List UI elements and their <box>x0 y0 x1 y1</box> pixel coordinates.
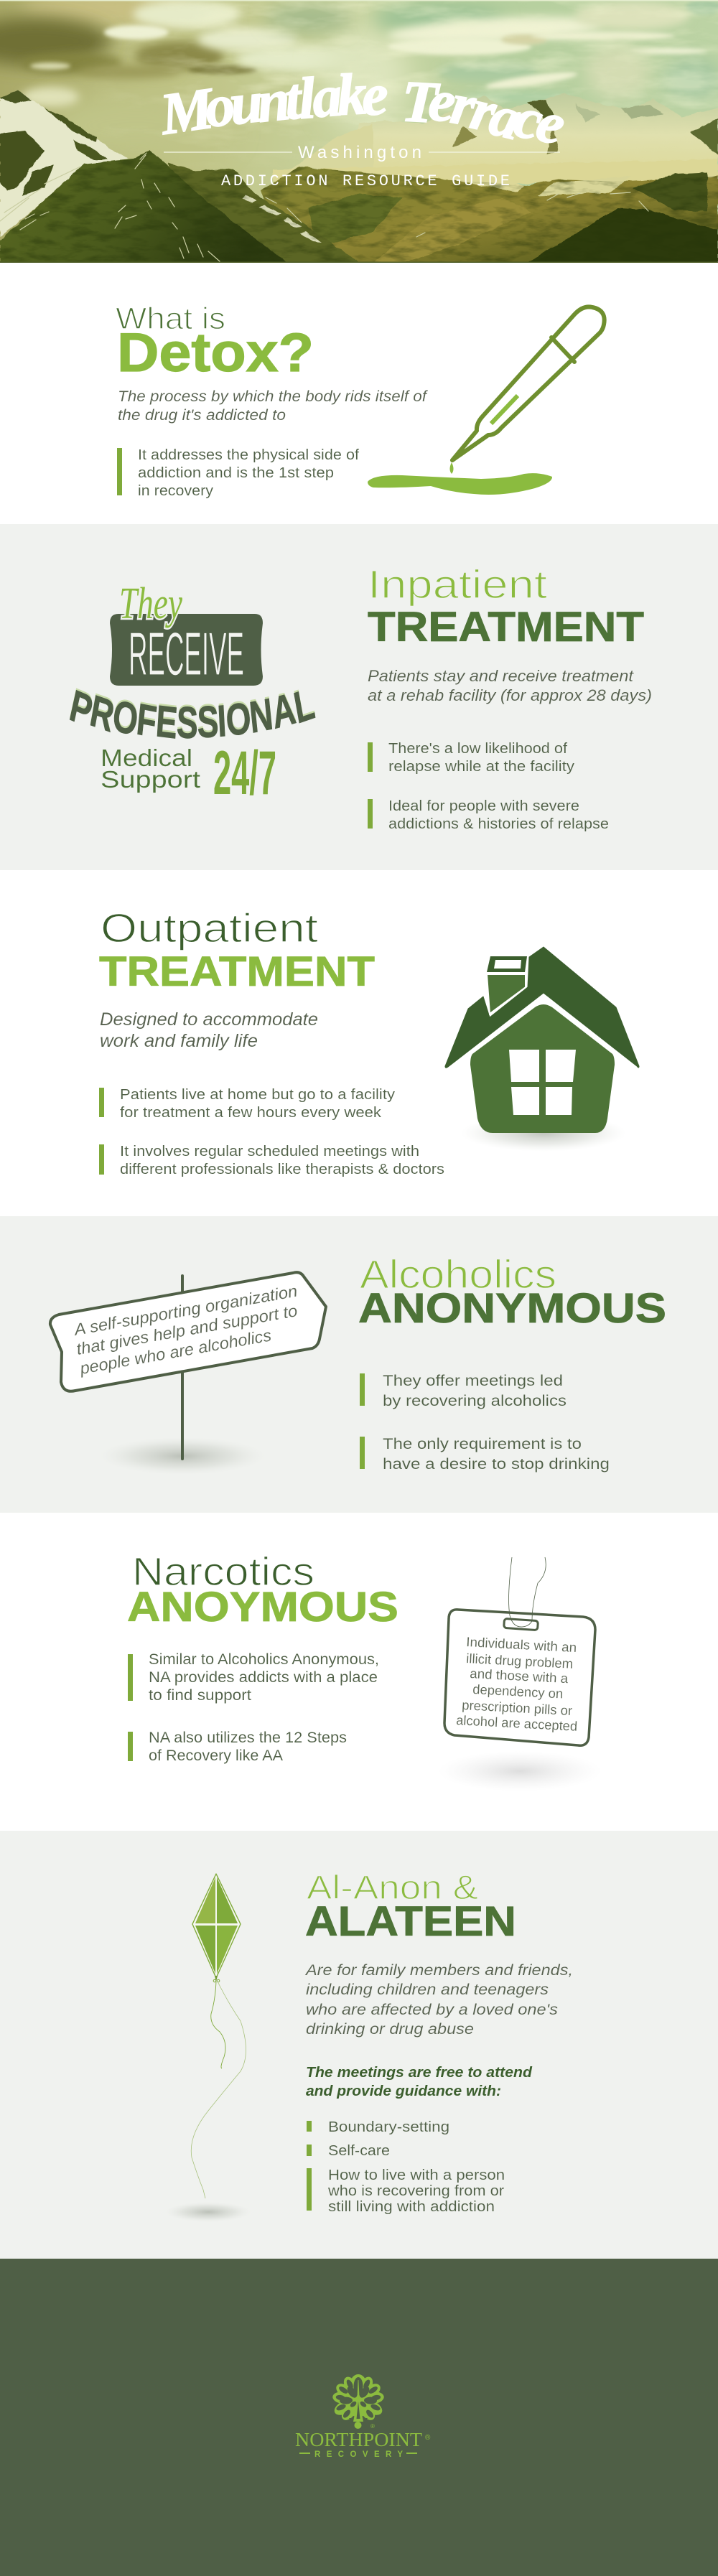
panel: alcoholics anonymous <box>0 1216 718 1513</box>
heading: Alcoholics Anonymous: Alcoholics <box>360 1251 556 1297</box>
al-anon bold intro: and provide guidance with: <box>306 2083 501 2099</box>
AA bullet 1 <box>360 1373 567 1409</box>
tag text: alcohol are accepted <box>456 1712 578 1734</box>
al-anon bold intro: The meetings are free to attend <box>306 2065 533 2081</box>
al-anon description: who are affected by a loved one's <box>306 2002 559 2018</box>
hero tagline: ADDICTION RESOURCE GUIDE <box>221 172 510 190</box>
heading: Narcotics Anoymous <box>127 1549 398 1630</box>
outpatient description: Designed to accommodate <box>100 1009 318 1030</box>
heading: Al-Anon and Alateen: ALATEEN <box>305 1898 516 1945</box>
tag text: illicit drug problem <box>466 1651 574 1671</box>
mountain sky photo <box>0 0 718 263</box>
inpatient bullet 2 <box>368 798 609 832</box>
word: PROFESSIONAL: PROFESSIONAL <box>65 676 318 746</box>
logo wordmark: ® <box>425 2434 431 2442</box>
list: living with a person in recovery: How to live with a person <box>328 2167 505 2183</box>
tag text: Individuals with an <box>466 1634 577 1655</box>
outpatient description <box>100 1009 318 1051</box>
mountains <box>0 90 718 263</box>
list: self-care: Self-care <box>328 2143 390 2159</box>
heading: Al-Anon and Alateen: Al-Anon & <box>307 1868 478 1906</box>
word: They: They <box>119 579 182 628</box>
panel: what is detox <box>0 263 718 524</box>
outpatient description: work and family life <box>100 1031 258 1051</box>
outpatient bullet 2: It involves regular scheduled meetings with <box>120 1144 419 1159</box>
NA bullet 1 <box>128 1651 379 1704</box>
panel: footer <box>0 2259 718 2576</box>
tag text <box>456 1634 578 1734</box>
sign text: A self-supporting organization <box>71 1282 299 1339</box>
sign text: people who are alcoholics <box>78 1325 273 1378</box>
NA bullet 1: to find support <box>149 1687 251 1704</box>
logo: northpoint recovery <box>295 2374 431 2459</box>
tag text: dependency on <box>472 1681 564 1702</box>
outpatient bullet 1: Patients live at home but go to a facility <box>120 1087 395 1103</box>
al-anon description <box>304 1962 573 2038</box>
word: PROFESSIONAL: PROFESSIONAL <box>65 678 318 748</box>
logo wordmark: RECOVERY <box>314 2450 403 2459</box>
inpatient bullet 1: relapse while at the facility <box>388 759 574 775</box>
heading: Al-Anon and Alateen <box>305 1868 516 1945</box>
heading: Outpatient Treatment: Outpatient <box>101 905 318 951</box>
heading: Alcoholics Anonymous: ANONYMOUS <box>358 1285 666 1332</box>
panel: outpatient treatment <box>0 870 718 1216</box>
detox bullet: addiction and is the 1st step <box>138 465 334 481</box>
AA bullet 1: They offer meetings led <box>383 1373 563 1389</box>
al-anon bold intro <box>306 2065 533 2099</box>
list: living with a person in recovery <box>307 2167 505 2215</box>
AA bullet 2: The only requirement is to <box>383 1436 582 1452</box>
icon: hanging tag <box>438 1557 602 1791</box>
logo mark: ® <box>370 2423 375 2430</box>
logo wordmark <box>295 2429 431 2459</box>
inpatient bullet 2: Ideal for people with severe <box>388 798 579 814</box>
words: Medical Support: Medical <box>101 745 192 771</box>
tag text: prescription pills or <box>462 1697 573 1718</box>
icon: signpost <box>50 1272 326 1475</box>
detox bullet <box>117 447 359 499</box>
al-anon description: including children and teenagers <box>306 1982 549 1998</box>
heading: Outpatient Treatment: TREATMENT <box>99 948 375 995</box>
list: boundary-setting: Boundary-setting <box>328 2119 449 2135</box>
heading: What is Detox: Detox? <box>117 322 314 383</box>
inpatient bullet 2: addictions & histories of relapse <box>388 816 609 832</box>
detox description <box>118 388 428 424</box>
heading: What is Detox <box>116 302 314 383</box>
badge: they receive professional medical support 24/7 <box>65 579 318 808</box>
outpatient bullet 1 <box>99 1087 395 1121</box>
AA bullet 1: by recovering alcoholics <box>383 1393 567 1409</box>
panel: al-anon and alateen <box>0 1831 718 2259</box>
al-anon description: Are for family members and friends, <box>304 1962 573 1979</box>
NA bullet 2 <box>128 1730 347 1764</box>
inpatient description: at a rehab facility (for approx 28 days) <box>368 686 652 704</box>
hero subtitle: Washington: Washington <box>298 143 421 162</box>
list: self-care <box>307 2143 390 2159</box>
icon: dropper and puddle <box>368 307 605 495</box>
list: living with a person in recovery: who is recovering from or <box>327 2183 504 2199</box>
sign text: that gives help and support to <box>75 1301 299 1358</box>
icon: kite <box>165 1874 251 2222</box>
heading: Alcoholics Anonymous <box>358 1251 666 1332</box>
badge: they receive professional medical support 24/7: Support <box>101 766 200 793</box>
outpatient bullet 2 <box>99 1144 444 1177</box>
heading: Inpatient Treatment: Inpatient <box>368 561 548 607</box>
heading: Outpatient Treatment <box>99 905 375 995</box>
hero title: Mountlake Terrace: Mountlake Terrace <box>155 61 572 158</box>
number: 24/7: 24/7 <box>213 739 276 808</box>
heading: Narcotics Anoymous: ANOYMOUS <box>127 1584 398 1630</box>
detox bullet: It addresses the physical side of <box>138 447 359 463</box>
inpatient description: Patients stay and receive treatment <box>368 667 634 685</box>
badge: they receive professional medical support 24/7: RECEIVE <box>129 620 244 689</box>
hero banner <box>0 0 718 263</box>
heading: Inpatient Treatment <box>368 561 644 650</box>
detox description: The process by which the body rids itself of <box>118 388 428 405</box>
inpatient description <box>368 667 652 704</box>
icon: house <box>445 947 639 1152</box>
NA bullet 2: NA also utilizes the 12 Steps <box>149 1730 347 1746</box>
detox description: the drug it's addicted to <box>118 407 286 424</box>
NA bullet 2: of Recovery like AA <box>149 1747 283 1764</box>
outpatient bullet 2: different professionals like therapists & doctors <box>120 1162 444 1177</box>
inpatient bullet 1 <box>368 741 574 775</box>
panel: inpatient treatment <box>0 524 718 870</box>
inpatient bullet 1: There's a low likelihood of <box>388 741 567 757</box>
panel: narcotics anonymous <box>0 1513 718 1831</box>
AA bullet 2 <box>360 1436 610 1473</box>
logo wordmark: NORTHPOINT <box>295 2429 423 2450</box>
NA bullet 1: Similar to Alcoholics Anonymous, <box>149 1651 379 1668</box>
heading: What is Detox: What is <box>116 302 225 336</box>
al-anon description: drinking or drug abuse <box>306 2021 474 2038</box>
outpatient bullet 1: for treatment a few hours every week <box>120 1105 382 1121</box>
badge panel <box>110 614 263 686</box>
logo mark <box>332 2374 385 2430</box>
sign text <box>71 1282 299 1378</box>
list: living with a person in recovery: still living with addiction <box>328 2199 495 2215</box>
heading: Inpatient Treatment: TREATMENT <box>368 604 644 650</box>
tag text: and those with a <box>470 1666 569 1686</box>
heading: Narcotics Anoymous: Narcotics <box>132 1549 314 1594</box>
NA bullet 1: NA provides addicts with a place <box>149 1669 378 1686</box>
AA bullet 2: have a desire to stop drinking <box>383 1456 610 1473</box>
detox bullet: in recovery <box>138 483 213 499</box>
